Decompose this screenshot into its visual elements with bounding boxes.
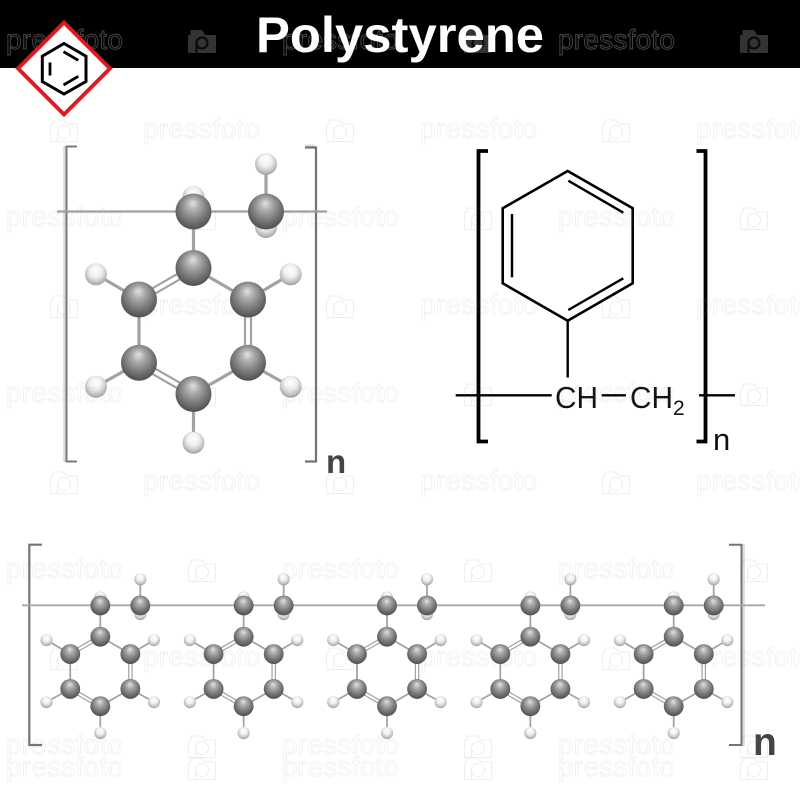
right bracket (696, 151, 706, 442)
monomer 1 (40, 573, 160, 739)
watermark grid: pressfoto (558, 377, 675, 408)
panel: polymer chain (22, 544, 777, 764)
watermark grid: pressfoto (143, 289, 260, 320)
left bracket (29, 545, 42, 745)
monomer 3 (327, 573, 447, 739)
bond lines (456, 321, 735, 395)
watermark row on title bar: pressfoto (558, 24, 675, 55)
CH2 group: CH (630, 380, 673, 415)
left bracket (478, 151, 488, 442)
watermark grid: pressfoto (558, 729, 675, 760)
watermark grid: pressfoto (6, 729, 123, 760)
monomer 2 (184, 573, 303, 739)
watermark grid: pressfoto (282, 553, 399, 584)
icon: benzene diamond badge (18, 22, 110, 114)
backbone line (22, 604, 765, 606)
watermark row on title bar: pressfoto (6, 24, 123, 55)
watermark grid: pressfoto (143, 641, 260, 672)
watermark grid: pressfoto (282, 751, 399, 782)
watermark row on title bar (6, 24, 768, 55)
title: Polystyrene (256, 7, 544, 63)
watermark grid: pressfoto (282, 377, 399, 408)
monomer 5 (614, 573, 733, 739)
watermark grid: pressfoto (420, 113, 537, 144)
benzene ring (503, 171, 633, 321)
repeat subscript n: n (713, 422, 730, 457)
watermark grid: pressfoto (143, 113, 260, 144)
right bracket (729, 544, 744, 746)
watermark grid: pressfoto (282, 201, 399, 232)
panel: large ball-and-stick monomer (57, 146, 346, 480)
watermark grid: pressfoto (282, 729, 399, 760)
watermark grid: pressfoto (6, 751, 123, 782)
watermark grid: pressfoto (558, 553, 675, 584)
watermark grid: pressfoto (6, 377, 123, 408)
title bar (0, 0, 800, 68)
repeat subscript n: n (753, 721, 777, 764)
styrene unit model (85, 153, 302, 454)
CH group: CH (555, 380, 598, 415)
repeat subscript n: n (326, 443, 346, 480)
watermark grid: pressfoto (558, 751, 675, 782)
backbone line (57, 210, 327, 213)
watermark grid: pressfoto (558, 201, 675, 232)
watermark grid: pressfoto (420, 465, 537, 496)
left bracket (65, 146, 77, 462)
watermark grid: pressfoto (143, 465, 260, 496)
watermark grid: pressfoto (6, 553, 123, 584)
watermark grid: pressfoto (420, 641, 537, 672)
right bracket (305, 146, 316, 462)
panel: structural formula (456, 151, 735, 457)
monomer 4 (470, 573, 590, 739)
watermark grid: pressfoto (6, 201, 123, 232)
subscript 2: 2 (673, 397, 685, 420)
watermark grid: pressfoto (420, 289, 537, 320)
watermark row on title bar: pressfoto (282, 24, 399, 55)
